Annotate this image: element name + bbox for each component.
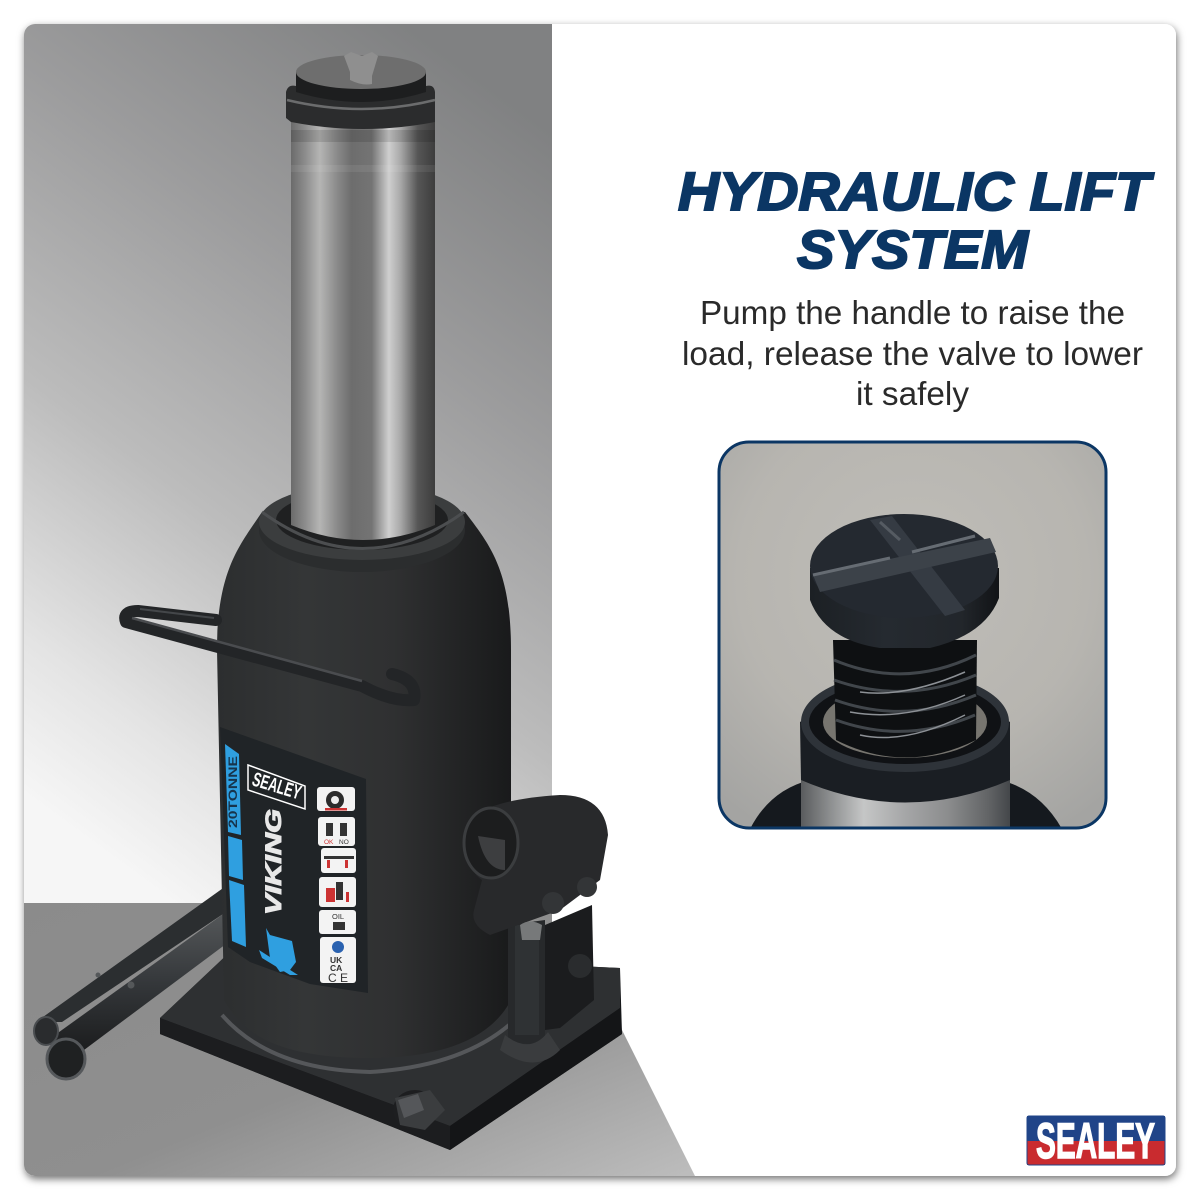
heading: HYDRAULIC LIFT [678, 162, 1154, 222]
label: blue viking ship [259, 928, 298, 975]
inset: jack shoulder behind [751, 782, 1060, 826]
label: icon glyphs: CE [328, 971, 348, 985]
body text [682, 294, 1143, 412]
jack: pump handle rods [34, 886, 226, 1079]
inset photo: ram cap close-up [718, 441, 1108, 831]
jack: pump bracket and release cylinder [464, 795, 608, 1062]
jack: carry handle loop [125, 609, 415, 700]
jack: steel ram [291, 110, 435, 540]
jack: ram cap [296, 52, 426, 102]
inset: cap side [810, 568, 999, 648]
body text: Pump the handle to raise the [700, 294, 1125, 331]
inset: steel ram [801, 780, 1010, 826]
jack: product label [220, 727, 368, 993]
jack: main cylinder body [217, 512, 511, 1058]
inset: cross grooves [813, 516, 996, 616]
label: white safety icons [317, 787, 356, 983]
label: icon glyphs: OK [324, 839, 334, 846]
label: icon glyphs: UK [330, 955, 343, 965]
inset: dark collar [800, 676, 1010, 802]
label: icon glyphs [324, 791, 354, 985]
body text: it safely [856, 375, 970, 412]
label: blue stripes [225, 744, 246, 947]
inset: navy frame [719, 442, 1106, 828]
jack: ram collar [286, 86, 435, 129]
heading: SYSTEM [797, 220, 1029, 280]
background: grey studio wall and floor [24, 24, 695, 1176]
jack: base plate [160, 950, 622, 1150]
label: viking wordmark: VIKING [261, 809, 286, 915]
inset: coiled spring thread [833, 640, 977, 758]
label: icon glyphs: OIL [332, 912, 344, 921]
label: icon glyphs: CA [330, 963, 342, 973]
label: 20 tonne text: 20TONNE [226, 756, 240, 828]
inset: cap top [810, 514, 998, 604]
jack: neck collar [259, 484, 465, 572]
product photo: bottle jack [34, 52, 622, 1150]
label: sealey logo [248, 765, 305, 809]
label: icon glyphs: NO [339, 839, 349, 846]
label: sealey logo: SEALEY [250, 769, 304, 805]
heading [678, 162, 1154, 280]
body text: load, release the valve to lower [682, 335, 1143, 372]
